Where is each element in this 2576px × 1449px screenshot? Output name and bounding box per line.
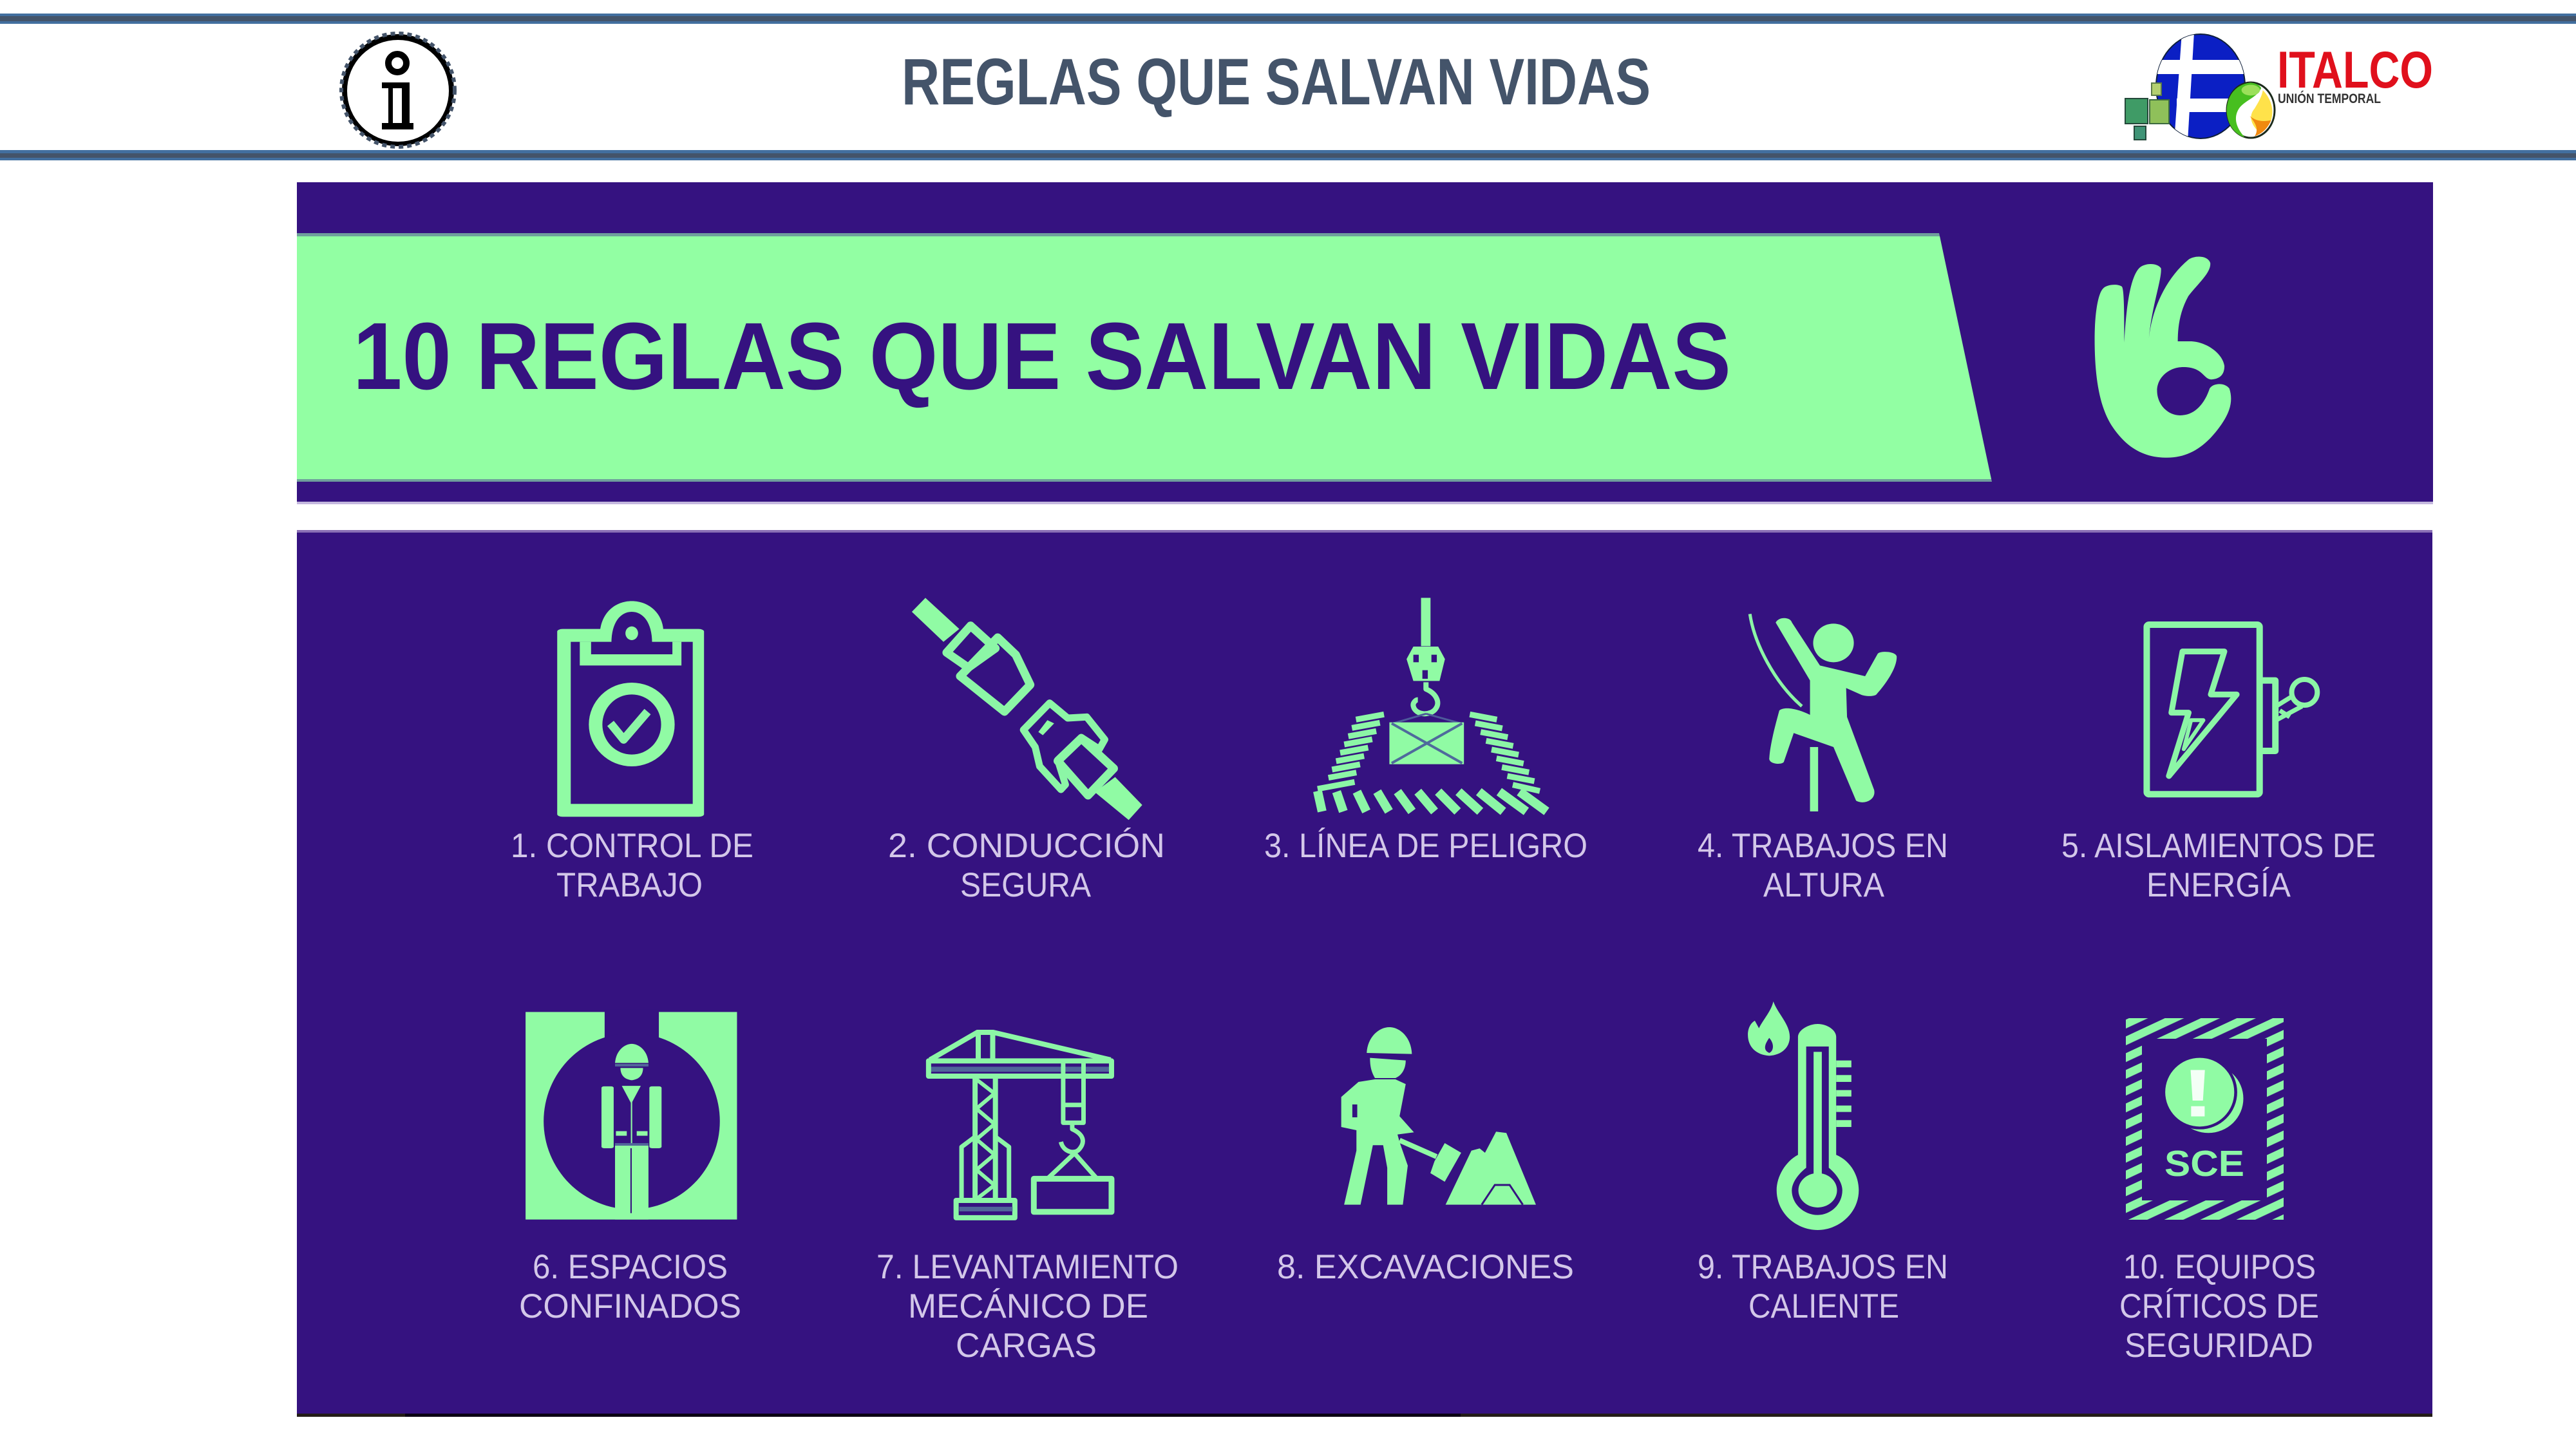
icon: hook and line of fire (rule 3)	[1318, 598, 1547, 811]
label: rule 7: MECÁNICO DE	[908, 1287, 1148, 1325]
label: rule 1	[511, 827, 753, 904]
header title: REGLAS QUE SALVAN VIDAS	[902, 45, 1651, 118]
label: rule 2	[888, 827, 1165, 904]
label: rule 4: ALTURA	[1763, 866, 1885, 904]
label: rule 4: 4. TRABAJOS EN	[1698, 827, 1948, 865]
label: rule 9: 9. TRABAJOS EN	[1698, 1248, 1948, 1286]
panel: rules grid	[297, 530, 2432, 1417]
panel: title banner	[297, 182, 2433, 504]
green ribbon	[297, 233, 1992, 482]
main title: 10 REGLAS QUE SALVAN VIDAS	[353, 303, 1731, 410]
label: rule 5	[2061, 827, 2376, 904]
icon: OK hand	[2095, 257, 2231, 458]
label: rule 6	[519, 1248, 741, 1325]
icon: worker in confined space (rule 6)	[526, 1009, 737, 1220]
icon: tower crane (rule 7)	[929, 1032, 1112, 1218]
label: rule 9: CALIENTE	[1748, 1287, 1899, 1325]
label: rule 5: 5. AISLAMIENTOS DE	[2061, 827, 2376, 865]
label: rule 5: ENERGÍA	[2146, 866, 2291, 904]
label: rule 10: SEGURIDAD	[2125, 1327, 2313, 1365]
label: rule 6: 6. ESPACIOS	[533, 1248, 728, 1286]
header band: bottom rule	[0, 150, 2576, 160]
label: rule 4	[1698, 827, 1948, 904]
icon: climber (rule 4)	[1750, 614, 1897, 811]
label: rule 3: 3. LÍNEA DE PELIGRO	[1264, 827, 1587, 865]
logo: ITALCO: ITALCO	[2277, 41, 2433, 99]
logo: ITALCO: UNIÓN TEMPORAL	[2278, 91, 2381, 106]
label: rule 9	[1698, 1248, 1948, 1325]
icon: clipboard (rule 1)	[557, 601, 704, 817]
logo: ITALCO	[2125, 32, 2433, 142]
label: rule 7: 7. LEVANTAMIENTO	[876, 1248, 1179, 1286]
label: rule 2: SEGURA	[960, 866, 1092, 904]
icon: electrical panel (rule 5)	[2146, 625, 2317, 794]
label: rule 1: TRABAJO	[556, 866, 703, 904]
label: rule 1: 1. CONTROL DE	[511, 827, 753, 865]
icon: SCE critical equipment sign (rule 10)	[2126, 1018, 2284, 1220]
icon: excavation worker (rule 8)	[1341, 1027, 1536, 1205]
label: rule 7: CARGAS	[956, 1327, 1097, 1365]
label: rule 7	[876, 1248, 1179, 1365]
label: rule 8: 8. EXCAVACIONES	[1277, 1248, 1574, 1286]
label: rule 2: 2. CONDUCCIÓN	[888, 827, 1165, 865]
icon: information badge	[341, 33, 455, 147]
icon: thermometer and flame (rule 9)	[1748, 1001, 1859, 1230]
icon: SCE critical equipment sign (rule 10): SCE	[2164, 1143, 2244, 1184]
label: rule 6: CONFINADOS	[519, 1287, 741, 1325]
label: rule 10: 10. EQUIPOS	[2123, 1248, 2316, 1286]
label: rule 10: CRÍTICOS DE	[2119, 1287, 2319, 1325]
label: rule 10	[2119, 1248, 2319, 1365]
icon: seat belt (rule 2)	[912, 598, 1142, 820]
header band: top rule	[0, 14, 2576, 24]
